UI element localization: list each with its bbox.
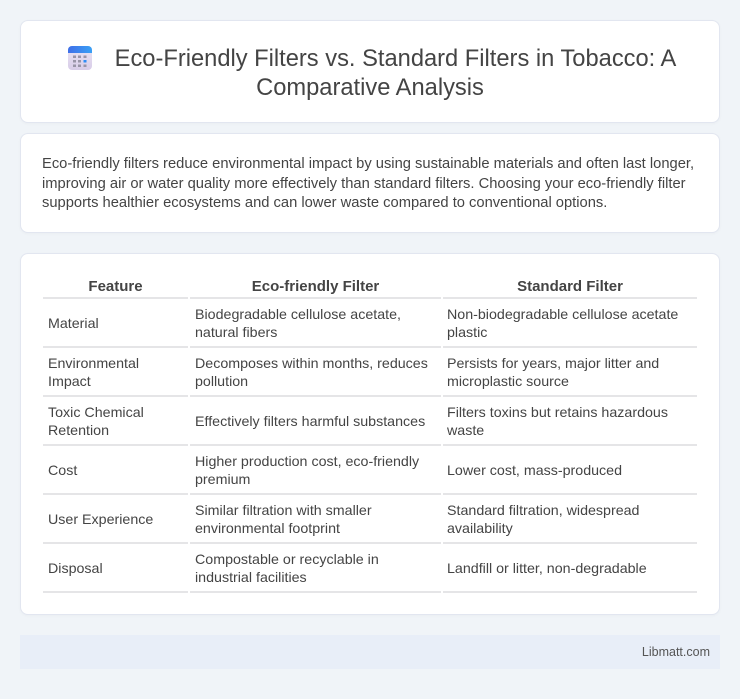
Environmental eco: pollution [195,374,248,390]
Material standard [447,307,678,341]
Environmental standard [447,356,659,390]
Toxic standard [447,405,668,439]
footer credit: Libmatt.com [642,645,710,659]
row: User Experience: User Experience [48,512,153,528]
header: Eco-friendly Filter: Eco-friendly Filter [252,278,379,295]
Cost eco: Higher production cost, eco-friendly [195,454,419,470]
row: Environmental Impact: Environmental [48,356,139,372]
table card [20,253,720,615]
title card [20,20,720,123]
intro text: Eco-friendly filters reduce environmental impact by using sustainable materials and often last longer, [42,156,694,172]
Cost standard: Lower cost, mass-produced [447,463,622,479]
row: Toxic Chemical Retention: Toxic Chemical [48,405,144,421]
Cost eco: premium [195,472,250,488]
Environmental standard: Persists for years, major litter and [447,356,659,372]
Cost eco [195,454,420,488]
Toxic standard: waste [447,423,484,439]
Material standard: plastic [447,325,487,341]
Toxic standard: Filters toxins but retains hazardous [447,405,668,421]
intro card [20,133,720,233]
row: Material: Material [48,316,99,332]
User eco: Similar filtration with smaller [195,503,372,519]
header: Standard Filter: Standard Filter [517,278,623,295]
User eco: environmental footprint [195,521,340,537]
row: Toxic Chemical Retention [48,405,144,439]
Material eco [195,307,401,341]
Material standard: Non-biodegradable cellulose acetate [447,307,678,323]
Disposal eco: industrial facilities [195,570,307,586]
intro text [42,156,694,211]
Environmental eco [195,356,428,390]
Environmental standard: microplastic source [447,374,569,390]
comparison table [43,278,697,593]
Disposal standard: Landfill or litter, non-degradable [447,561,647,577]
icon: calendar grid [68,46,92,70]
row: Toxic Chemical Retention: Retention [48,423,109,439]
heading: Eco-Friendly Filters vs. Standard Filters in Tobacco: A [115,46,676,72]
Disposal eco [195,552,379,586]
row: Cost: Cost [48,463,77,479]
heading [115,46,676,101]
row: Disposal: Disposal [48,561,103,577]
row: Environmental Impact [48,356,139,390]
Material eco: natural fibers [195,325,277,341]
intro text: supports healthier ecosystems and can lower waste compared to conventional options. [42,195,607,211]
Environmental eco: Decomposes within months, reduces [195,356,428,372]
intro text: improving air or water quality more effectively than standard filters. Choosing your eco-friendly filter [42,176,686,192]
User standard [447,503,640,537]
Material eco: Biodegradable cellulose acetate, [195,307,401,323]
User standard: Standard filtration, widespread [447,503,640,519]
Disposal eco: Compostable or recyclable in [195,552,379,568]
User standard: availability [447,521,513,537]
heading: Comparative Analysis [256,75,484,101]
User eco [195,503,372,537]
Toxic eco: Effectively filters harmful substances [195,414,425,430]
row: Environmental Impact: Impact [48,374,91,390]
header: Feature: Feature [88,278,143,295]
footer bar [20,635,720,669]
